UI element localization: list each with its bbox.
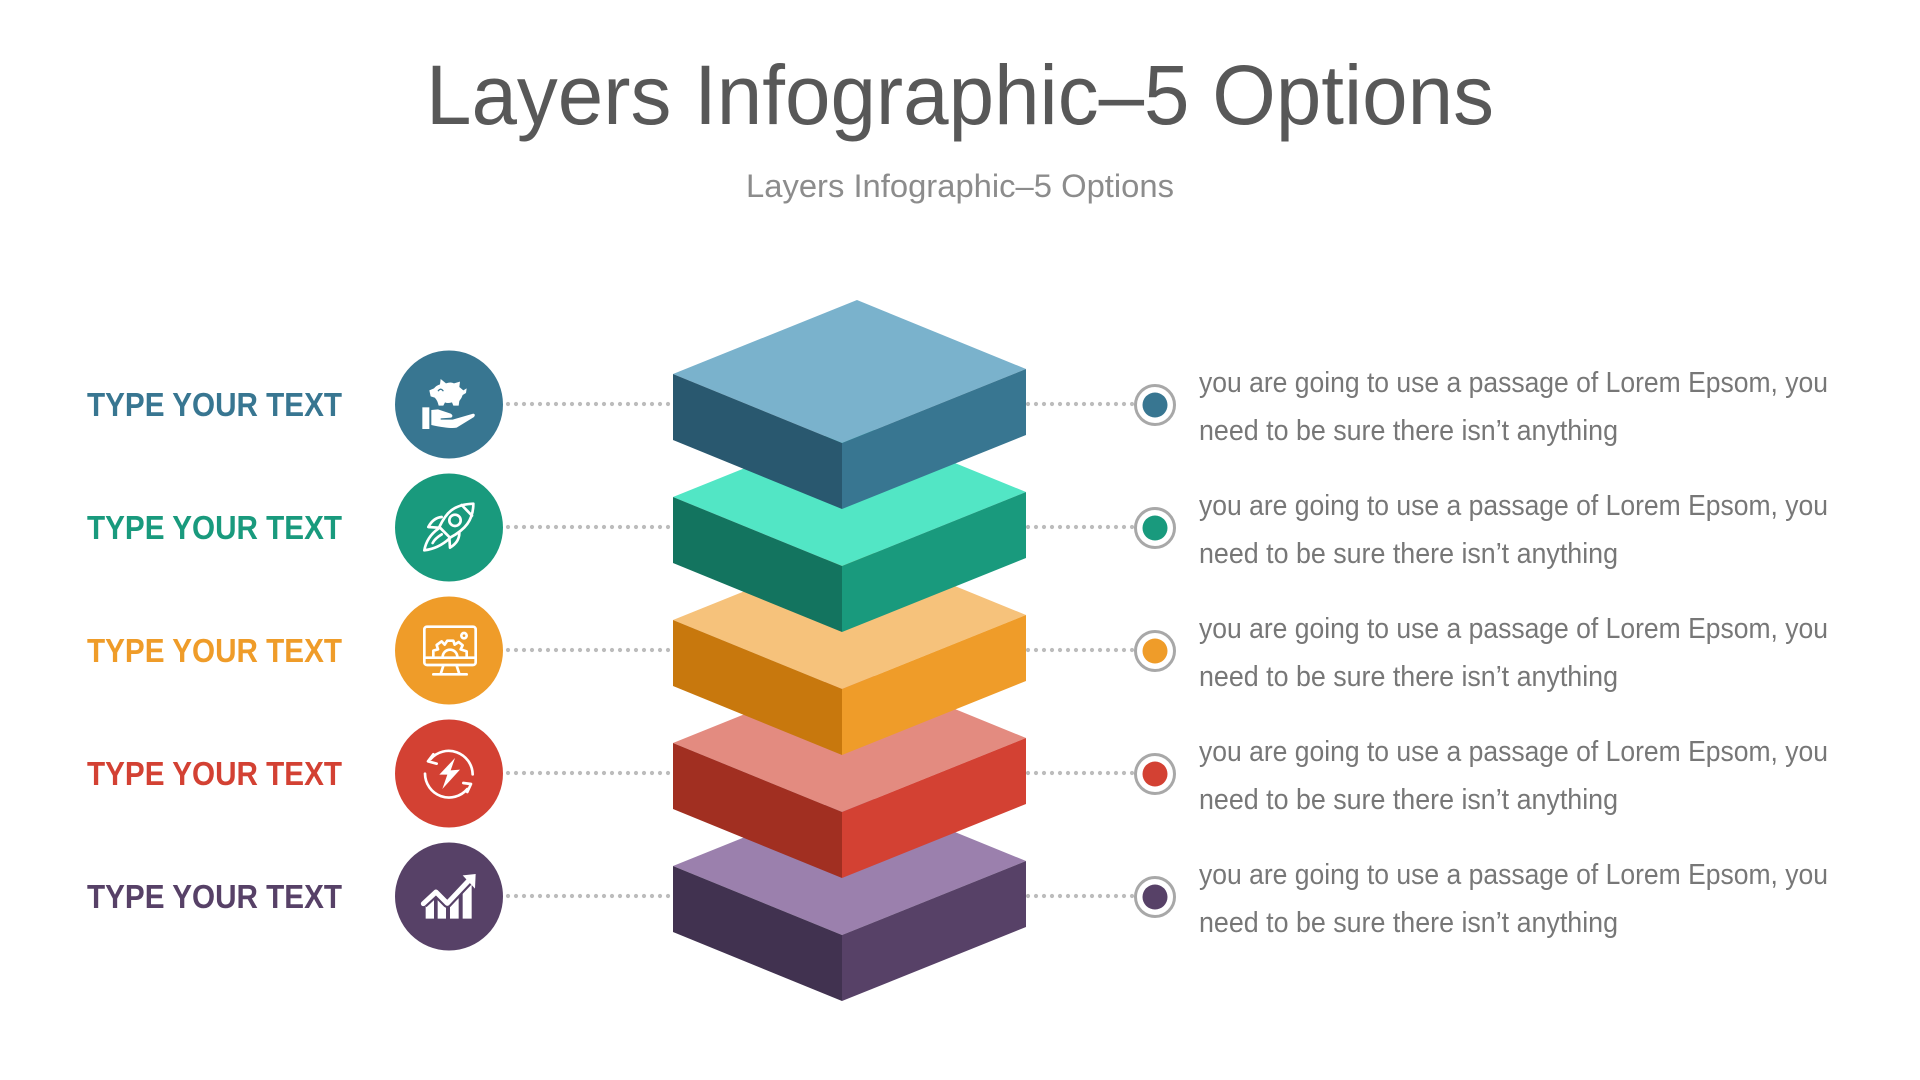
left connector 1 (508, 402, 672, 406)
description 5: you are going to use a passage of Lorem Epsom, you (1199, 859, 1828, 891)
description 2: need to be sure there isn’t anything (1199, 538, 1618, 570)
label 2: TYPE YOUR TEXT (87, 509, 342, 546)
description 1: need to be sure there isn’t anything (1199, 415, 1618, 447)
row 5: growth (87, 842, 1828, 950)
marker 5 (1136, 878, 1174, 916)
icon: growth chart (395, 842, 503, 950)
label 3: TYPE YOUR TEXT (87, 632, 342, 669)
layer 5: purple (673, 792, 1026, 1001)
description 1: you are going to use a passage of Lorem Epsom, you (1199, 367, 1828, 399)
layer 1: blue (673, 300, 1026, 509)
marker 1 (1136, 386, 1174, 424)
icon: piggy bank in hand (395, 350, 503, 458)
description 4: need to be sure there isn’t anything (1199, 784, 1618, 816)
description 4: you are going to use a passage of Lorem Epsom, you (1199, 736, 1828, 768)
row 2: rocket (87, 474, 1828, 582)
icon: monitor with gear (395, 596, 503, 704)
description 3: need to be sure there isn’t anything (1199, 661, 1618, 693)
icon: energy cycle (395, 720, 503, 828)
right connector 1 (1028, 402, 1134, 406)
description 3 (1199, 613, 1828, 693)
layer 3: orange (673, 546, 1026, 755)
row 1: savings (87, 350, 1828, 458)
right connector 2 (1028, 525, 1134, 529)
row 4: energy (87, 720, 1828, 828)
description 5: need to be sure there isn’t anything (1199, 907, 1618, 939)
right connector 3 (1028, 648, 1134, 652)
right connector 5 (1028, 894, 1134, 898)
row 3: monitor (87, 596, 1828, 704)
description 4 (1199, 736, 1828, 816)
left connector 4 (508, 771, 672, 775)
description 2 (1199, 490, 1828, 570)
left connector 3 (508, 648, 672, 652)
description 1 (1199, 367, 1828, 447)
marker 3 (1136, 632, 1174, 670)
label 5: TYPE YOUR TEXT (87, 878, 342, 915)
layer 2: green (673, 423, 1026, 632)
description 5 (1199, 859, 1828, 939)
description 3: you are going to use a passage of Lorem Epsom, you (1199, 613, 1828, 645)
marker 4 (1136, 754, 1174, 794)
layer 4: red (673, 669, 1026, 878)
subtitle: Layers Infographic–5 Options (746, 168, 1174, 204)
marker 2 (1136, 508, 1174, 548)
title: Layers Infographic–5 Options (426, 48, 1494, 142)
left connector 2 (508, 525, 672, 529)
icon: rocket (395, 474, 503, 582)
label 1: TYPE YOUR TEXT (87, 386, 342, 423)
left connector 5 (508, 894, 672, 898)
description 2: you are going to use a passage of Lorem Epsom, you (1199, 490, 1828, 522)
right connector 4 (1028, 771, 1134, 775)
label 4: TYPE YOUR TEXT (87, 755, 342, 792)
